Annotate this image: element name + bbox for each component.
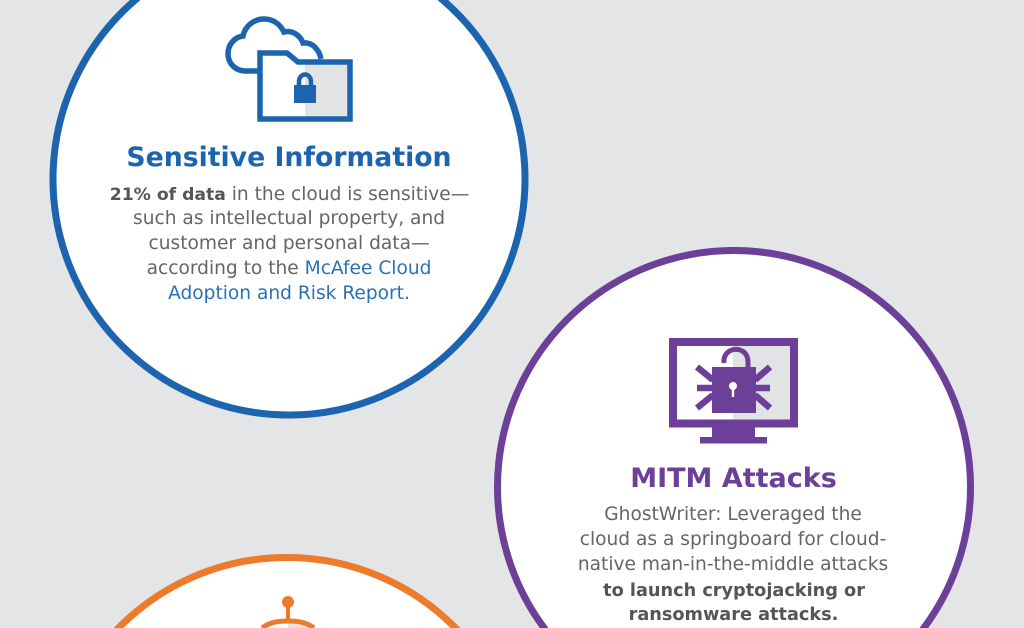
panel: sensitive information: [53, 0, 525, 415]
circle: mitm attacks: [497, 251, 970, 628]
text: mitm attacks body: cloud as a springboard for cloud-: [580, 529, 886, 550]
text: mitm attacks body: ransomware attacks.: [629, 605, 838, 625]
text: sensitive information body: such as intellectual property, and: [133, 208, 445, 229]
icon: robot antenna: [262, 596, 314, 628]
circle: orange: [118, 557, 456, 628]
text: sensitive information body: customer and personal data—: [149, 233, 430, 254]
panel: orange circle (cropped): [118, 557, 456, 628]
text: mitm attacks body: GhostWriter: Leveraged the: [604, 504, 862, 525]
panel: mitm attacks: [497, 251, 970, 628]
text: sensitive information body: Adoption and Risk Report.: [168, 283, 410, 304]
text: sensitive information body: according to the McAfee Cloud: [147, 258, 431, 279]
heading: sensitive information: Sensitive Information: [126, 142, 452, 173]
icon: cloud with locked folder: [228, 19, 350, 119]
heading: mitm attacks: MITM Attacks: [630, 463, 837, 494]
text: mitm attacks body: to launch cryptojacking or: [603, 581, 865, 601]
icon: monitor with bug padlock: [673, 342, 794, 444]
circle: sensitive information: [53, 0, 525, 415]
text: mitm attacks body: native man-in-the-middle attacks: [578, 554, 888, 575]
text: sensitive information body: 21% of data in the cloud is sensitive—: [110, 184, 469, 205]
